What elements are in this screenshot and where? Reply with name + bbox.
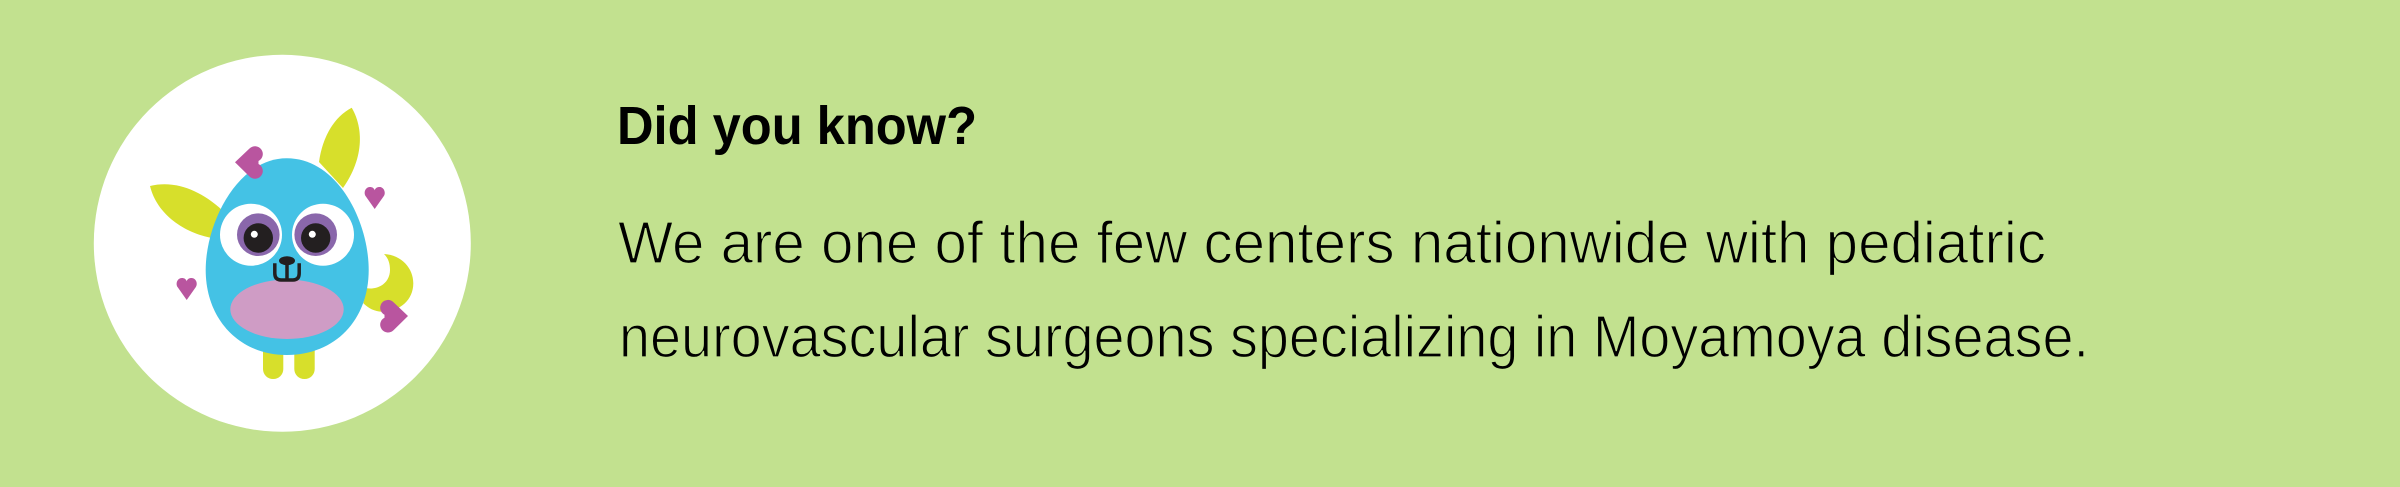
monster tail [363, 254, 413, 312]
heading: Did you know? [617, 96, 977, 156]
monster belly [230, 280, 344, 339]
monster legs [263, 330, 315, 379]
heart: lower left [177, 278, 197, 300]
monster body [206, 158, 369, 355]
icon: white circle with monster mascot [94, 55, 471, 432]
monster left ear [150, 184, 222, 238]
monster right eye [292, 204, 354, 266]
monster right ear [319, 108, 360, 188]
body text [618, 210, 2089, 370]
body line 2: neurovascular surgeons specializing in Moyamoya disease. [619, 304, 2089, 370]
monster nose and mouth [275, 256, 299, 280]
heart: bottom right, rotated [380, 300, 408, 332]
body line 1: We are one of the few centers nationwide with pediatric [618, 210, 2046, 276]
heart: top, rotated [235, 146, 263, 179]
white circle [94, 55, 471, 432]
heart: upper right [365, 187, 385, 209]
monster left eye [220, 204, 282, 266]
